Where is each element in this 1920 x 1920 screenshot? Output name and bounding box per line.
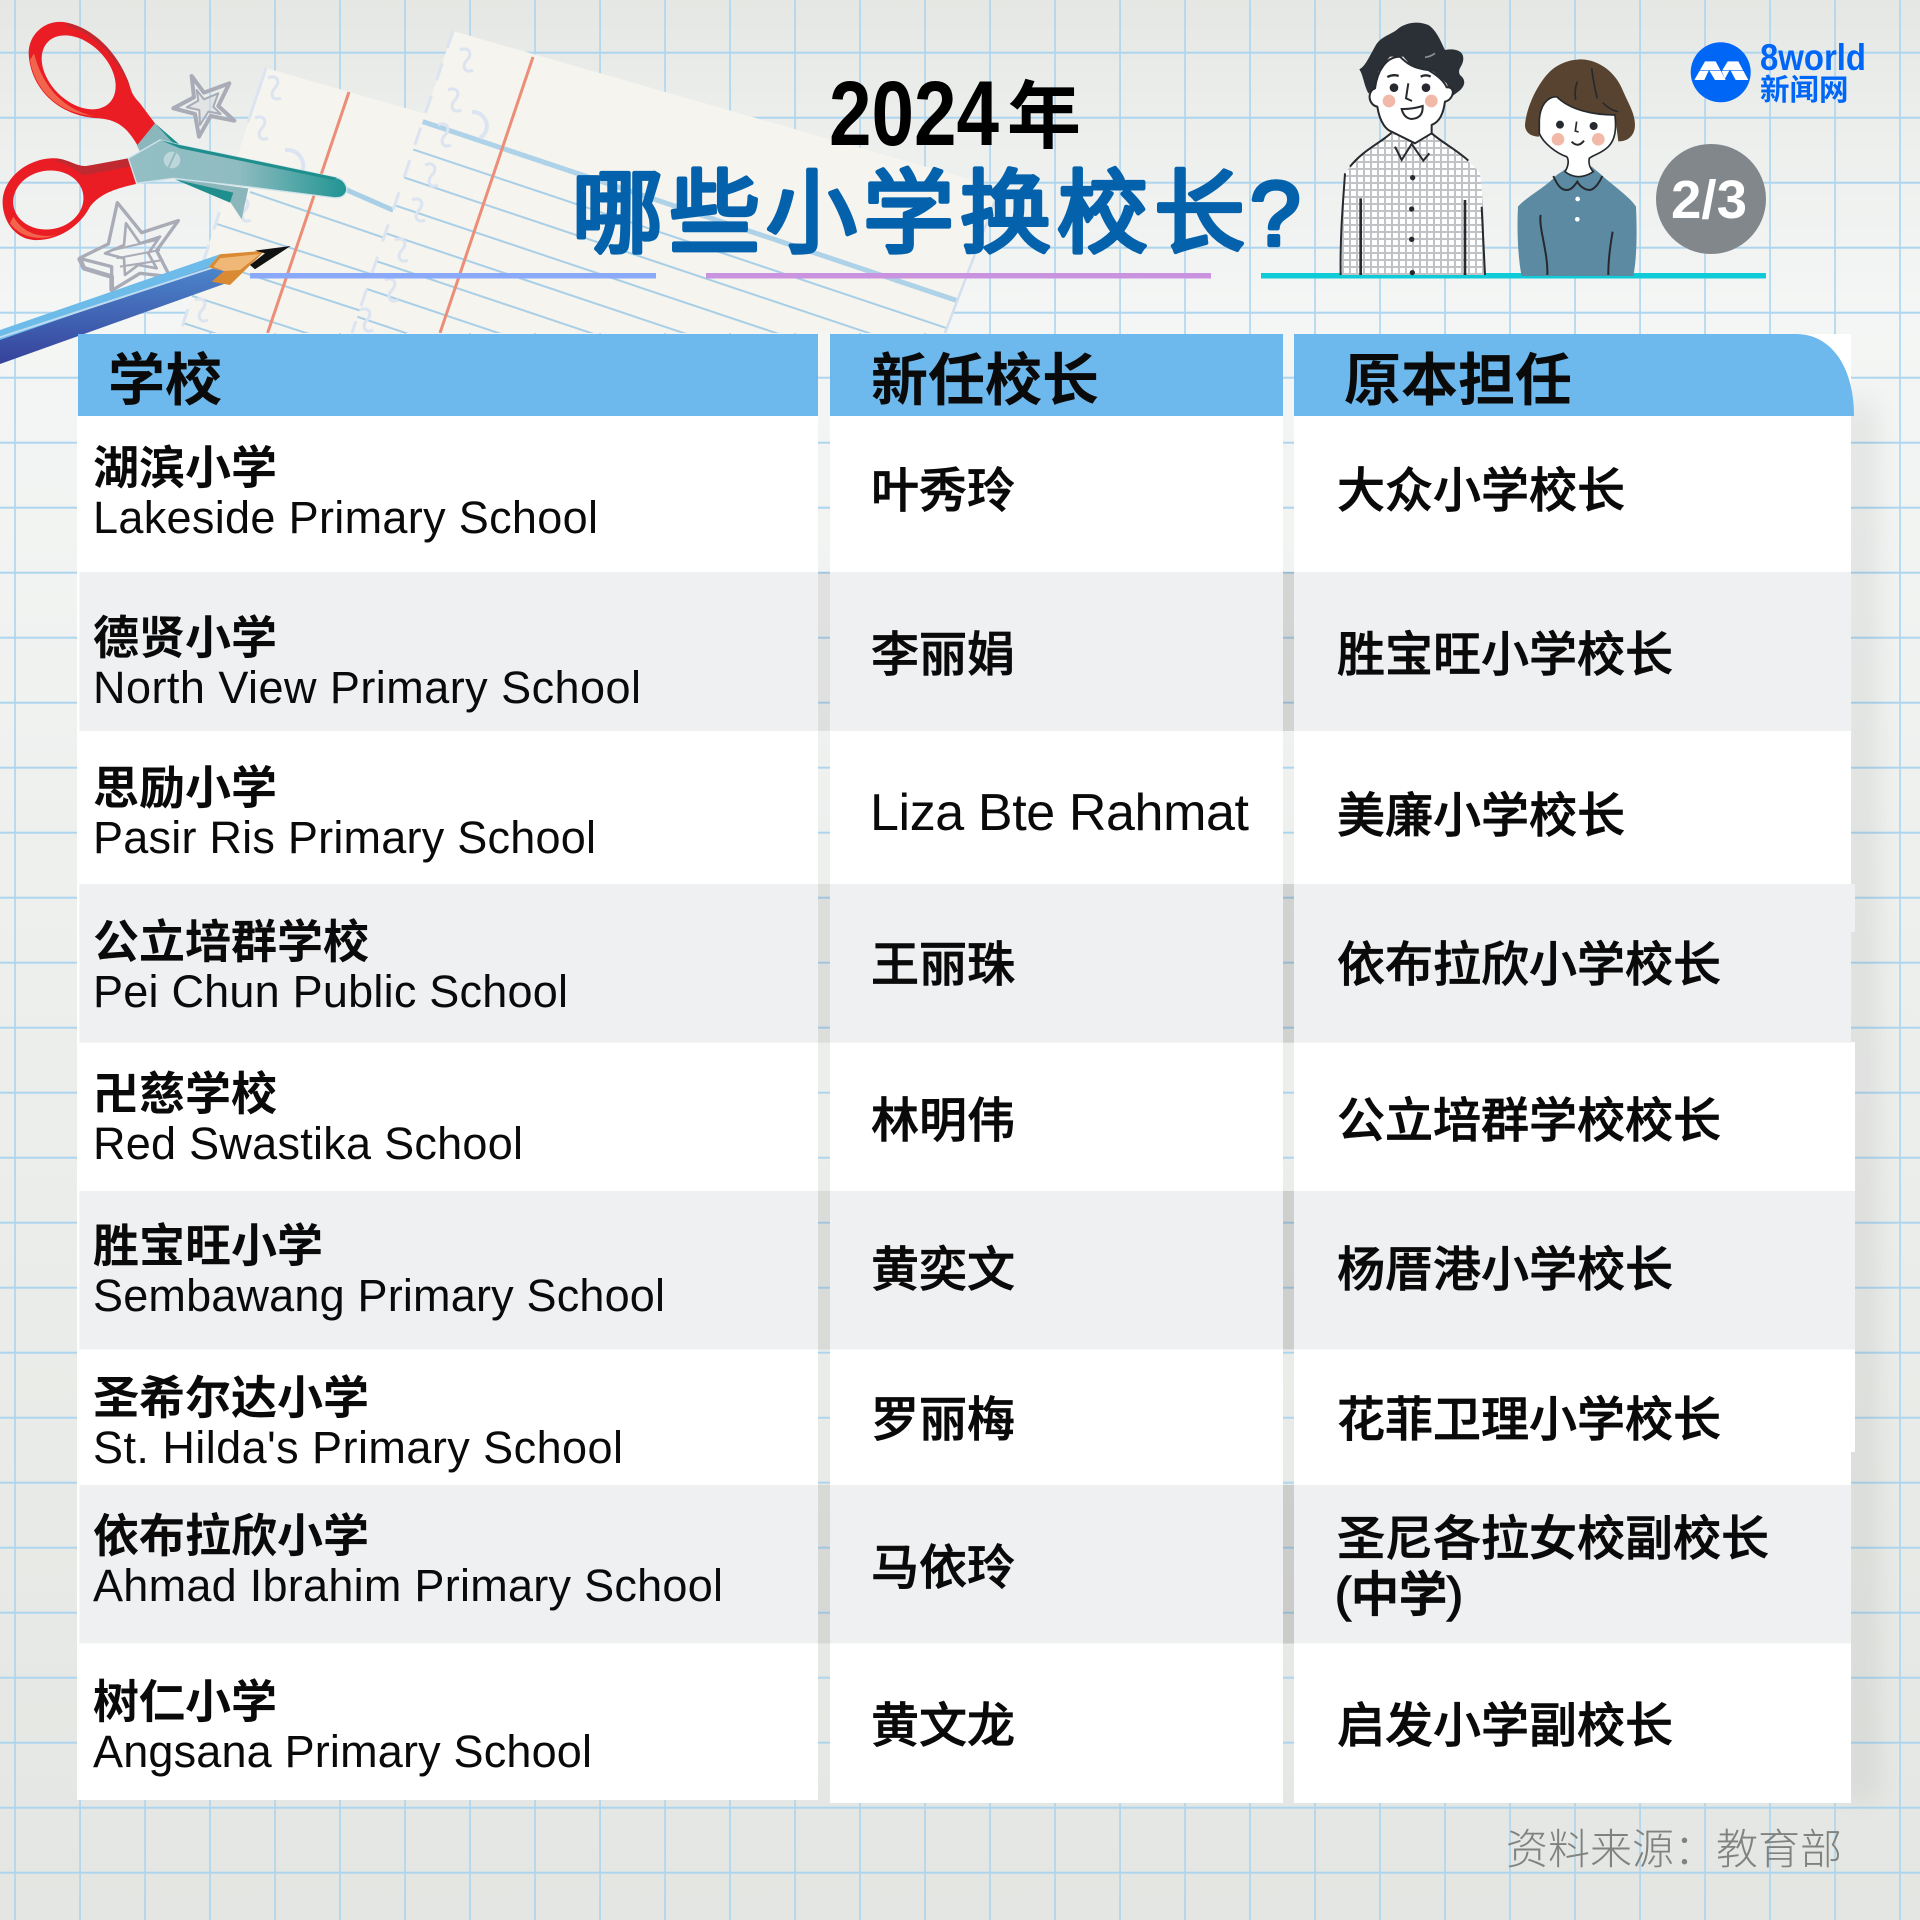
row 6: Sembawang Primary School [93,1270,665,1321]
logo: 8world 新闻网: 8world [1760,37,1866,78]
row 9: Angsana Primary School [93,1726,592,1777]
row 2: 胜宝旺小学校长 [1337,629,1673,682]
icon: pencil [0,246,291,364]
title: main heading: 哪些小学换校长 [572,164,1251,265]
row 2: North View Primary School [93,662,641,713]
row 4: 公立培群学校 [93,916,369,968]
page badge 2/3 [1656,144,1766,254]
row 1: 叶秀玲 [871,465,1015,518]
row 5: 林明伟 [871,1095,1015,1148]
row 5: 卍慈学校 [93,1068,277,1120]
row 7: 罗丽梅 [871,1394,1015,1447]
row 9 [93,1676,1673,1777]
icon: scissors [3,22,347,240]
icon: small star [173,76,234,137]
row 8: 依布拉欣小学 [93,1510,369,1562]
row 1: 湖滨小学 [93,442,277,494]
row 6 [93,1220,1673,1321]
row 6: 杨厝港小学校长 [1337,1244,1673,1297]
row 7: 花菲卫理小学校长 [1337,1394,1721,1447]
row 4 [93,916,1721,1017]
row 1: Lakeside Primary School [93,492,598,543]
row 5: Red Swastika School [93,1118,523,1169]
row 7: 圣希尔达小学 [93,1372,369,1424]
table header: 新任校长 [871,349,1099,413]
icon: large star [79,203,178,291]
row 7: St. Hilda's Primary School [93,1422,623,1473]
logo: 8world 新闻网: 新闻网 [1760,74,1849,107]
row 3 [93,762,1625,863]
table [77,334,1855,1803]
table header: 原本担任 [1344,349,1572,413]
source note: 资料来源：教育部 [1506,1826,1842,1873]
row 3: 美廉小学校长 [1337,790,1625,843]
row 3: Pasir Ris Primary School [93,812,596,863]
row 9: 树仁小学 [93,1676,277,1728]
row 8: 圣尼各拉女校副校长 [1337,1513,1769,1566]
title: year: 2024 [829,63,999,165]
row 2 [93,612,1673,713]
title: year: 年 [1007,75,1081,158]
row 8: 马依玲 [871,1542,1015,1595]
row 2: 德贤小学 [93,612,277,664]
soft table shadow [1845,400,1875,1800]
title underline: teal [1261,273,1766,278]
row 1 [93,442,1625,543]
table cell backgrounds [77,416,1855,1803]
row 5: 公立培群学校校长 [1337,1095,1721,1148]
row 6: 胜宝旺小学 [93,1220,323,1272]
row 4: 王丽珠 [871,939,1015,992]
row 9: 黄文龙 [871,1700,1015,1753]
row 5 [93,1068,1721,1169]
table header [78,334,1854,416]
title: main heading: ? [1250,164,1307,265]
row 2: 李丽娟 [871,629,1015,682]
illustration: torn notebook paper [181,30,995,334]
table header: 学校 [108,349,222,413]
row 6: 黄奕文 [871,1244,1015,1297]
illustration: man [1341,23,1485,275]
title underline: purple [706,273,1211,278]
row 4: 依布拉欣小学校长 [1337,939,1721,992]
page badge 2/3: 2/3 [1671,170,1747,230]
row 3: 思励小学 [93,762,277,814]
row 1: 大众小学校长 [1337,465,1625,518]
row 8 [93,1510,1769,1622]
logo: 8world 新闻网 [1691,37,1866,107]
row 8: Ahmad Ibrahim Primary School [93,1560,723,1611]
illustration: woman [1518,59,1637,276]
row 7 [93,1372,1721,1473]
row 3: Liza Bte Rahmat [870,784,1250,842]
row 8: (中学) [1335,1569,1463,1622]
row 9: 启发小学副校长 [1337,1700,1673,1753]
title underline: blue [250,273,656,278]
row 4: Pei Chun Public School [93,966,568,1017]
